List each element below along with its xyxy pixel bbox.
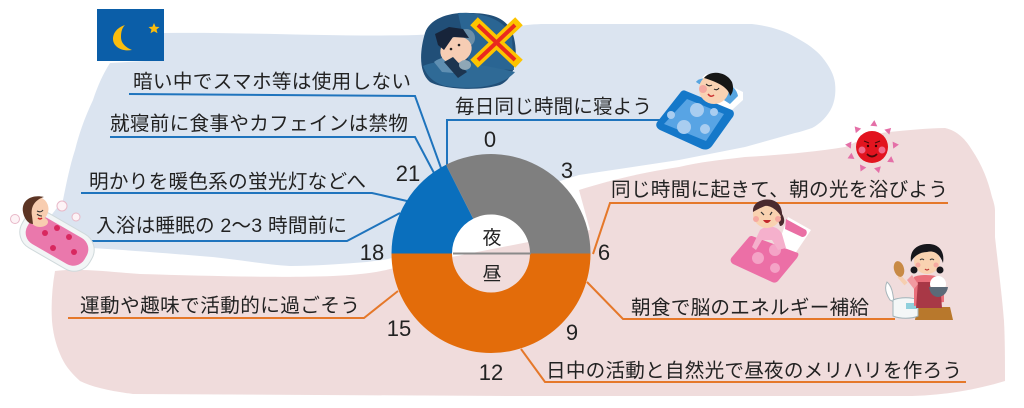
clock hour labels: 3 <box>561 158 573 183</box>
text: no food or caffeine before bed: 就寝前に食事やカフェインは禁物 <box>110 113 408 135</box>
center divider <box>453 252 531 254</box>
text: breakfast: 朝食で脳のエネルギー補給 <box>631 297 869 319</box>
text: same wake time and morning light: 同じ時間に起きて、朝の光を浴びよう <box>611 179 948 201</box>
clock hour labels: 9 <box>566 320 578 345</box>
panel: night background <box>40 24 835 266</box>
icon: girl waking up in pink futon <box>731 200 811 283</box>
icon: red smiling sun <box>845 120 899 174</box>
clock hour labels: 15 <box>387 316 411 341</box>
icon: woman bathing in tub <box>10 196 101 278</box>
center label: day: 昼 <box>482 259 502 286</box>
text: same bedtime: 毎日同じ時間に寝よう <box>455 96 652 118</box>
donut clock chart <box>392 154 590 353</box>
clock hour labels: 0 <box>484 127 496 152</box>
text: bath timing: 入浴は睡眠の 2～3 時間前に <box>96 215 347 237</box>
panel: day background <box>52 128 1005 396</box>
text: daytime activity and natural light: 日中の活動と自然光で昼夜のメリハリを作ろう <box>546 360 962 382</box>
clock hour labels: 18 <box>360 240 384 265</box>
clock hour labels: 6 <box>598 240 610 265</box>
text: warm lighting: 明かりを暖色系の蛍光灯などへ <box>89 171 366 193</box>
icon: night flag with moon and star <box>97 9 164 61</box>
segment: sleep gray 22-6 <box>446 154 590 254</box>
segment: day orange 6-18 <box>392 254 590 353</box>
center label: night: 夜 <box>482 223 502 250</box>
leader lines: night tips <box>81 94 660 241</box>
clock hour labels <box>360 127 610 385</box>
text: no smartphone in the dark: 暗い中でスマホ等は使用しない <box>133 71 411 93</box>
icon: woman with rice cooker and rice bowl <box>886 244 953 320</box>
icon: sleeping boy under blue futon <box>656 73 743 150</box>
segment: evening blue 18-22 <box>392 165 473 254</box>
clock hour labels: 12 <box>479 360 503 385</box>
leader lines: day tips <box>68 203 966 382</box>
clock hour labels: 21 <box>396 161 420 186</box>
icon: person using phone in bed with cross <box>421 13 516 89</box>
text: exercise and hobbies: 運動や趣味で活動的に過ごそう <box>80 295 360 317</box>
